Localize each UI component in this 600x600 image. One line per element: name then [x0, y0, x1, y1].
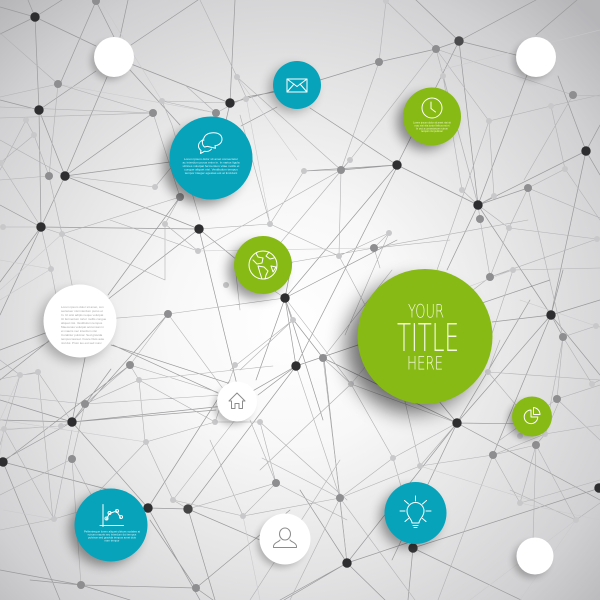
text block: white circle: Curabitur pulvinar. Sed gravida	[61, 333, 103, 337]
text block: chart circle	[84, 530, 140, 542]
panel: clock circle	[403, 88, 461, 146]
text block: speech circle	[182, 157, 240, 175]
panel: pie circle	[512, 396, 552, 436]
text block: white circle	[61, 305, 107, 345]
text block: speech circle: tempor integer egestas est at tincidunt	[185, 171, 237, 175]
text block: white circle: In. Ut wisi adipis neque volutpat	[61, 313, 103, 317]
panel: light bulb circle	[384, 482, 446, 544]
icon: line chart	[100, 504, 124, 526]
icon: person	[274, 528, 296, 548]
text block: clock circle	[413, 122, 451, 133]
panel: title circle	[358, 269, 492, 404]
title text: TITLE	[397, 316, 459, 360]
icon: clock	[422, 98, 442, 118]
icon: house	[229, 393, 245, 408]
text block: white circle: sectetuer nisi interdum purus et	[61, 309, 103, 313]
text block: white circle: Ut fermentum tortor mollis congue	[61, 317, 107, 321]
text block: white circle: aliquet nisi. Vestibulum tempus	[61, 321, 103, 325]
text block: speech circle: ultrices volutpat fermentum vitae mollis et	[183, 164, 240, 168]
panel: person circle	[260, 514, 310, 564]
text block: chart circle: pulvinar sed gravida tempus amet duis	[88, 536, 137, 540]
text block: clock circle: In orci a consectetuer rutrum	[416, 128, 448, 130]
icon: speech bubbles	[198, 133, 222, 154]
text block: clock circle: Lorem ipsum dolor sit amet nisi sit	[413, 122, 451, 124]
icon: pie chart	[524, 408, 540, 424]
title text: YOUR	[408, 300, 444, 322]
title text: HERE	[407, 354, 443, 374]
panel: text circle white	[44, 284, 116, 358]
text block: white circle: Lorem ipsum dolor sit amet, con	[61, 305, 104, 309]
text block: white circle: Maecenas volutpat accumsan in	[61, 325, 104, 329]
icon: light bulb	[400, 496, 431, 528]
panel: chart circle	[74, 488, 148, 562]
icon: envelope	[287, 79, 307, 92]
panel: globe circle	[234, 236, 292, 294]
panel: speech circle	[170, 116, 252, 200]
blank white circle: top right	[516, 37, 556, 77]
text block: white circle: nisl dui. Proin leo est sed nunc	[61, 341, 102, 345]
text block: white circle: et mauris nec interdum nisi	[61, 329, 97, 333]
text block: clock circle: mac nisi vita tortor finibus est et	[414, 124, 450, 128]
blank white circle: top left	[94, 37, 134, 77]
text block: chart circle: rutrum mauris nec interdum dui tempus	[88, 532, 137, 536]
text block: clock circle: tempor nisi pulvinar	[421, 130, 443, 133]
circle drop shadows	[39, 42, 551, 578]
title text	[397, 300, 459, 374]
text block: chart circle: Pellentesque lorem aliquet ultrices sodales at	[84, 530, 140, 534]
text block: speech circle: congue aliquet nisi. Vestibulum tempus	[184, 168, 238, 172]
panel: home circle	[217, 382, 257, 422]
blank white circle: bottom right	[516, 538, 554, 574]
text block: chart circle: nam tempor	[105, 538, 120, 542]
text block: speech circle: ac interdum purus enim in. In varius ligula	[182, 160, 240, 164]
panel: envelope circle	[273, 61, 321, 109]
text block: white circle: tempus laoreet. Fusce Duis aute	[61, 337, 105, 341]
text block: speech circle: Lorem ipsum dolor sit amet consectetur	[184, 157, 238, 161]
icon: globe	[249, 251, 277, 279]
